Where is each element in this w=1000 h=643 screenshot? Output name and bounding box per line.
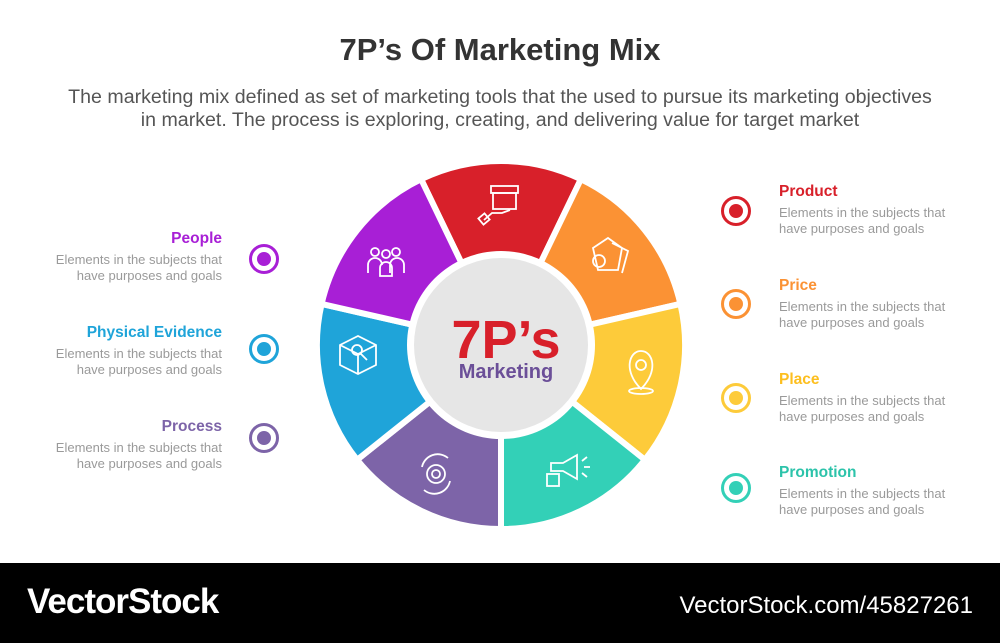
right item: place [721, 383, 751, 413]
text: Promotion [779, 464, 856, 481]
text: Elements in the subjects that [56, 346, 222, 361]
text: Process [162, 418, 222, 435]
text: Price [779, 277, 817, 294]
icon: product box hand [478, 186, 518, 225]
subtitle: in market. The process is exploring, creating, and delivering value for target market [141, 109, 859, 131]
text: Elements in the subjects that [56, 252, 222, 267]
left item: process [249, 423, 279, 453]
segment: promotion [501, 345, 645, 529]
segment: process [357, 345, 501, 529]
center circle: 7P’s [451, 310, 561, 370]
text: Place [779, 371, 820, 388]
segment: product [421, 161, 581, 345]
segment: place [501, 304, 685, 460]
text: Physical Evidence [87, 324, 222, 341]
text: Elements in the subjects that [56, 440, 222, 455]
footer url: VectorStock.com/45827261 [679, 592, 973, 619]
segment: people [322, 179, 501, 345]
icon: megaphone [547, 455, 590, 486]
right item: price [721, 289, 751, 319]
text: have purposes and goals [779, 502, 924, 517]
text: have purposes and goals [77, 268, 222, 283]
text: have purposes and goals [77, 362, 222, 377]
icon: place pin [629, 351, 653, 394]
icon: people [368, 248, 404, 276]
text: People [171, 230, 222, 247]
segment: price [501, 179, 680, 345]
text: Elements in the subjects that [779, 393, 945, 408]
icon: box magnifier [340, 336, 376, 374]
right item: product [721, 196, 751, 226]
left item: people [249, 244, 279, 274]
text: Product [779, 183, 838, 200]
center circle: Marketing [459, 361, 553, 383]
segment: physical evidence [317, 304, 501, 460]
title: 7P’s Of Marketing Mix [340, 32, 660, 67]
text: Elements in the subjects that [779, 486, 945, 501]
text: have purposes and goals [779, 221, 924, 236]
footer bar [0, 563, 1000, 643]
text: have purposes and goals [779, 409, 924, 424]
footer logo: VectorStock [27, 582, 218, 621]
right item: promotion [721, 473, 751, 503]
subtitle: The marketing mix defined as set of marketing tools that the used to pursue its marketing objectives [68, 86, 932, 108]
text: have purposes and goals [77, 456, 222, 471]
text: Elements in the subjects that [779, 205, 945, 220]
subtitle [68, 86, 932, 131]
center circle [407, 251, 595, 439]
left item: physical evidence [249, 334, 279, 364]
icon: price tag [593, 238, 628, 273]
text: have purposes and goals [779, 315, 924, 330]
text: Elements in the subjects that [779, 299, 945, 314]
icon: gear [422, 454, 450, 494]
